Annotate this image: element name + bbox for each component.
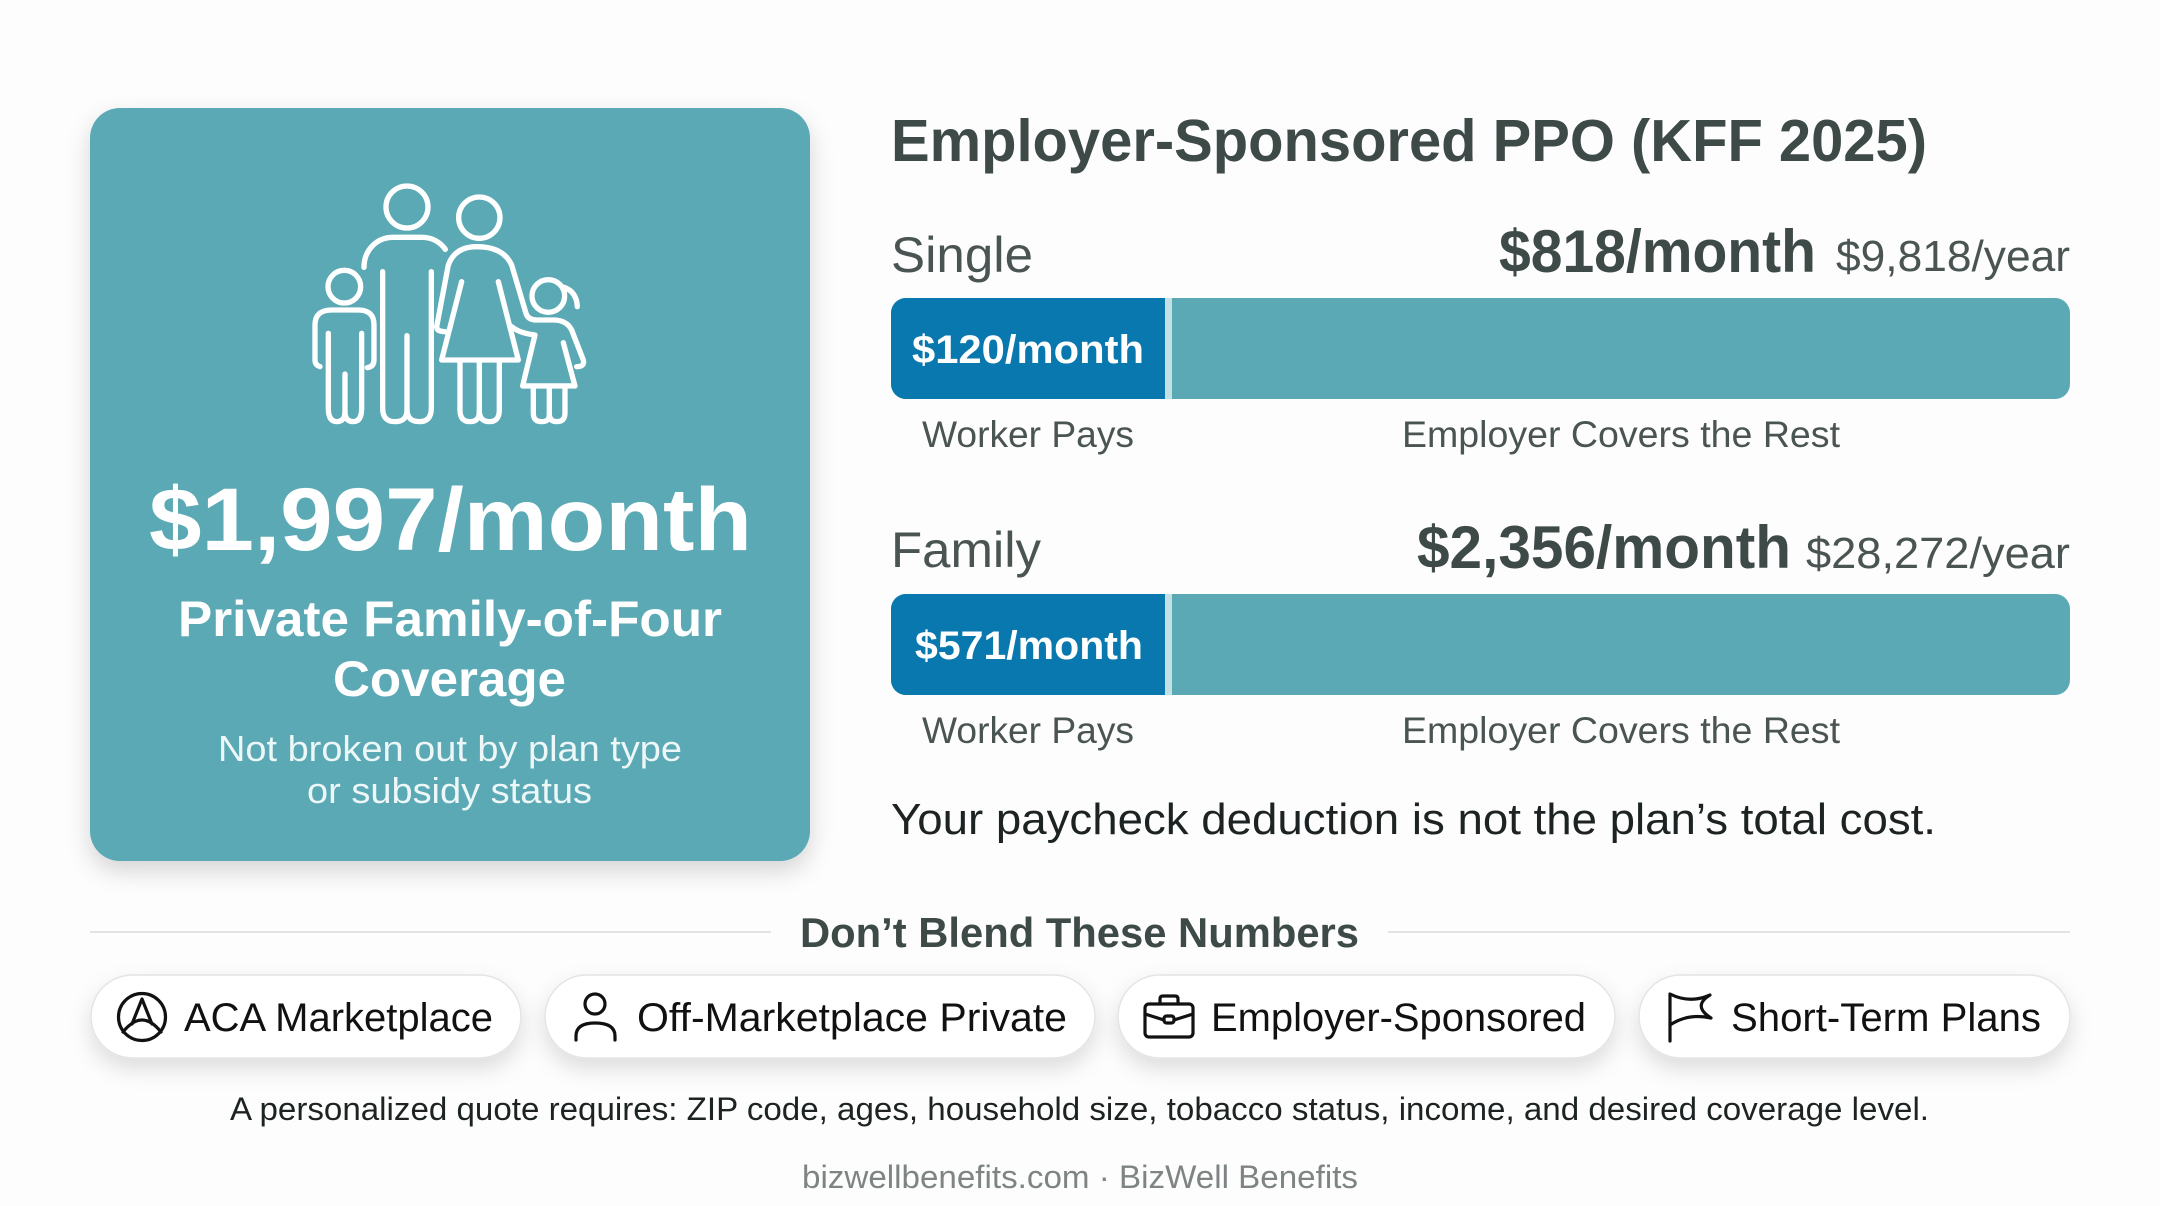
footer source: bizwellbenefits.com · BizWell Benefits [802, 1159, 1358, 1195]
label: family: Family [891, 522, 1041, 578]
pill: Employer-Sponsored: Employer-Sponsored [1211, 996, 1586, 1040]
card heading [178, 591, 722, 707]
card note: or subsidy status [307, 770, 592, 811]
card heading: Coverage [333, 651, 566, 707]
card heading: Private Family-of-Four [178, 591, 722, 647]
panel: family coverage [891, 514, 2070, 751]
icon: briefcase [1145, 996, 1193, 1037]
icon: person [576, 994, 615, 1040]
card background [90, 108, 810, 861]
big price: $1,997/month [149, 469, 752, 569]
panel heading: employer-sponsored PPO: Employer-Sponsored PPO (KFF 2025) [891, 108, 1927, 174]
panel: single coverage [891, 218, 2070, 455]
pill: ACA Marketplace: ACA Marketplace [184, 996, 493, 1040]
pill: Short-Term Plans [1639, 975, 2070, 1058]
section heading: don't blend: Don’t Blend These Numbers [800, 909, 1359, 956]
panel: private family coverage [90, 108, 810, 861]
stacked bar: single [891, 298, 2070, 399]
annual total: single: $9,818/year [1836, 232, 2070, 281]
icon: ACA badge [118, 994, 166, 1040]
pill: Off-Marketplace Private: Off-Marketplace Private [637, 996, 1067, 1040]
annual total: family: $28,272/year [1806, 529, 2070, 578]
card note [218, 728, 682, 811]
bar caption: employer covers: Employer Covers the Rest [1402, 414, 1841, 455]
icon: flag [1670, 994, 1711, 1041]
pill: Short-Term Plans: Short-Term Plans [1731, 996, 2041, 1040]
stacked bar: single: $120/month [912, 328, 1144, 372]
monthly total: single: $818/month [1499, 218, 1816, 285]
bar caption: worker pays: Worker Pays [922, 414, 1134, 455]
stacked bar: family [891, 594, 2070, 695]
card note: Not broken out by plan type [218, 728, 682, 769]
pill: Off-Marketplace Private [545, 975, 1095, 1058]
note: quote requirements: A personalized quote requires: ZIP code, ages, household size, tobacco status, income, and desired coverage level. [230, 1091, 1929, 1127]
pill: ACA Marketplace [91, 975, 521, 1058]
label: single: Single [891, 227, 1033, 283]
monthly total: family: $2,356/month [1417, 514, 1791, 581]
icon: family of four [315, 186, 584, 422]
stacked bar: family: $571/month [915, 624, 1143, 668]
pill: Employer-Sponsored [1118, 975, 1615, 1058]
takeaway text: Your paycheck deduction is not the plan’s total cost. [891, 795, 1936, 844]
bar caption: employer covers: Employer Covers the Rest [1402, 710, 1841, 751]
bar caption: worker pays: Worker Pays [922, 710, 1134, 751]
